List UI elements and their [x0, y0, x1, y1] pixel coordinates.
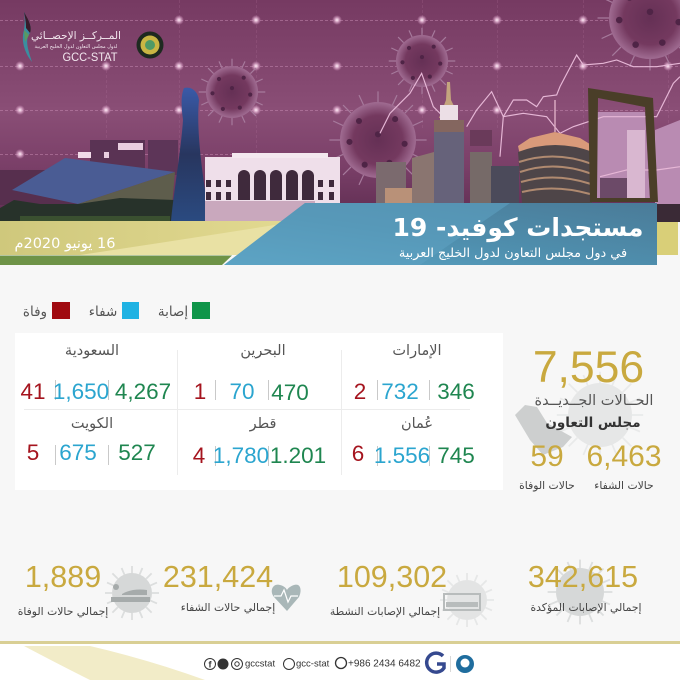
- recoveries: 6,463: [586, 440, 662, 473]
- recoveries label: حالات الشفاء: [594, 479, 654, 492]
- Kuwait: [27, 416, 156, 465]
- logo: TUV badge: [456, 655, 474, 673]
- Bahrain: [194, 343, 309, 405]
- icon: snapchat: [284, 658, 294, 670]
- stat: total confirmed: [528, 560, 642, 624]
- UAE: الإمارات: [392, 343, 442, 359]
- logo title: المــركــز الإحصــائي: [31, 30, 121, 42]
- stat: total deaths: [18, 560, 159, 620]
- legend: [23, 302, 210, 320]
- Oman: 6: [352, 441, 364, 466]
- Qatar: 4: [193, 443, 205, 468]
- Qatar: قطر: [249, 416, 276, 432]
- title: مستجدات كوفيد- 19: [392, 213, 644, 243]
- title panel: [224, 203, 657, 265]
- Kuwait: الكويت: [71, 416, 113, 432]
- footer: [0, 642, 680, 680]
- icon: heart: [272, 585, 301, 611]
- banner: date strip: [0, 221, 678, 265]
- glowing grid points: [15, 15, 673, 159]
- legend: شفاء: [89, 304, 117, 320]
- Bahrain: 1: [194, 379, 206, 404]
- legend: وفاة: [23, 304, 47, 320]
- social handle: gccstat: [245, 658, 275, 670]
- Saudi Arabia: [20, 343, 171, 404]
- icon: virus: [548, 560, 612, 624]
- stat: total confirmed: إجمالي الإصابات المؤكدة: [530, 601, 642, 614]
- Oman: 1.556: [374, 443, 430, 468]
- chart lines: [380, 55, 680, 177]
- decorative swoosh: [24, 646, 205, 680]
- GCC label: مجلس التعاون: [545, 415, 641, 431]
- viruses: [199, 0, 680, 189]
- new cases total: 7,556: [533, 343, 644, 392]
- Kuwait: 527: [118, 440, 156, 465]
- virus watermark and map: [515, 372, 643, 458]
- Oman palace: [205, 153, 340, 222]
- logo: certification G: [427, 653, 444, 672]
- UAE: [354, 343, 475, 404]
- Bahrain: البحرين: [240, 343, 286, 359]
- panel: GCC new cases: [515, 343, 662, 492]
- stat: total recoveries: إجمالي حالات الشفاء: [181, 601, 275, 614]
- Kuwait: 675: [59, 440, 97, 465]
- new cases label: الحــالات الجــديــدة: [535, 393, 653, 409]
- date: 16 يونيو 2020م: [14, 236, 116, 252]
- Makkah clock tower and towers: [376, 82, 519, 204]
- icon: virus with patient: [105, 566, 159, 620]
- frame interior tower: [627, 130, 645, 198]
- Bahrain: 70: [229, 379, 255, 404]
- round building: [518, 100, 593, 203]
- deaths label: حالات الوفاة: [519, 479, 575, 492]
- website handle: gcc-stat: [296, 658, 330, 670]
- stat: total active: إجمالي الإصابات النشطة: [330, 605, 440, 618]
- icon: ribbon: [23, 12, 32, 62]
- Oman: 745: [437, 443, 475, 468]
- stat: total deaths: إجمالي حالات الوفاة: [18, 605, 108, 618]
- Saudi Arabia: 1,650: [53, 379, 109, 404]
- UAE: 346: [437, 379, 475, 404]
- logo subtitle: لدول مجلس التعاون لدول الخليج العربية: [35, 44, 118, 50]
- icon: virus with hospital bed: [440, 573, 494, 627]
- Kuwait building: [0, 158, 175, 221]
- Saudi Arabia: 41: [20, 379, 46, 404]
- distant skyline: [0, 140, 178, 205]
- subtitle: في دول مجلس التعاون لدول الخليج العربية: [399, 246, 627, 261]
- stat: total deaths: 1,889: [25, 560, 101, 594]
- light panel behind frame: [597, 112, 680, 205]
- Oman: [352, 416, 475, 468]
- Kuwait: 5: [27, 440, 39, 465]
- phone number: +986 2434 6482: [348, 658, 421, 670]
- stat: total confirmed: 342,615: [528, 560, 638, 594]
- Dubai frame: [588, 88, 658, 202]
- Qatar: [193, 416, 326, 468]
- panel: country table: [15, 333, 503, 490]
- deaths: 59: [530, 440, 564, 473]
- Qatar torch tower: [171, 88, 205, 221]
- Qatar: 1,780: [213, 443, 269, 468]
- icon: whatsapp: [336, 658, 346, 668]
- grid of glowing lines: [0, 0, 680, 200]
- icon: GCC emblem: [136, 32, 164, 58]
- UAE: 732: [381, 379, 419, 404]
- stat: total active: [330, 560, 494, 627]
- panel: header banner: [0, 0, 680, 222]
- legend: إصابة: [158, 304, 188, 320]
- stat: total active: 109,302: [337, 560, 447, 594]
- sky background: [0, 0, 680, 222]
- Saudi Arabia: 4,267: [115, 379, 171, 404]
- logo: GCC-STAT: [23, 12, 163, 64]
- Saudi Arabia: السعودية: [65, 343, 119, 359]
- stat: total recoveries: 231,424: [163, 560, 273, 594]
- stat: total recoveries: [163, 560, 301, 614]
- Bahrain: 470: [271, 380, 309, 405]
- logo latin name: GCC-STAT: [62, 50, 118, 64]
- Oman: عُمان: [401, 416, 433, 432]
- UAE: 2: [354, 379, 366, 404]
- dark city right of frame: [656, 204, 680, 222]
- social icons: f: [208, 660, 212, 670]
- Qatar: 1.201: [270, 443, 326, 468]
- social icons: [204, 658, 242, 670]
